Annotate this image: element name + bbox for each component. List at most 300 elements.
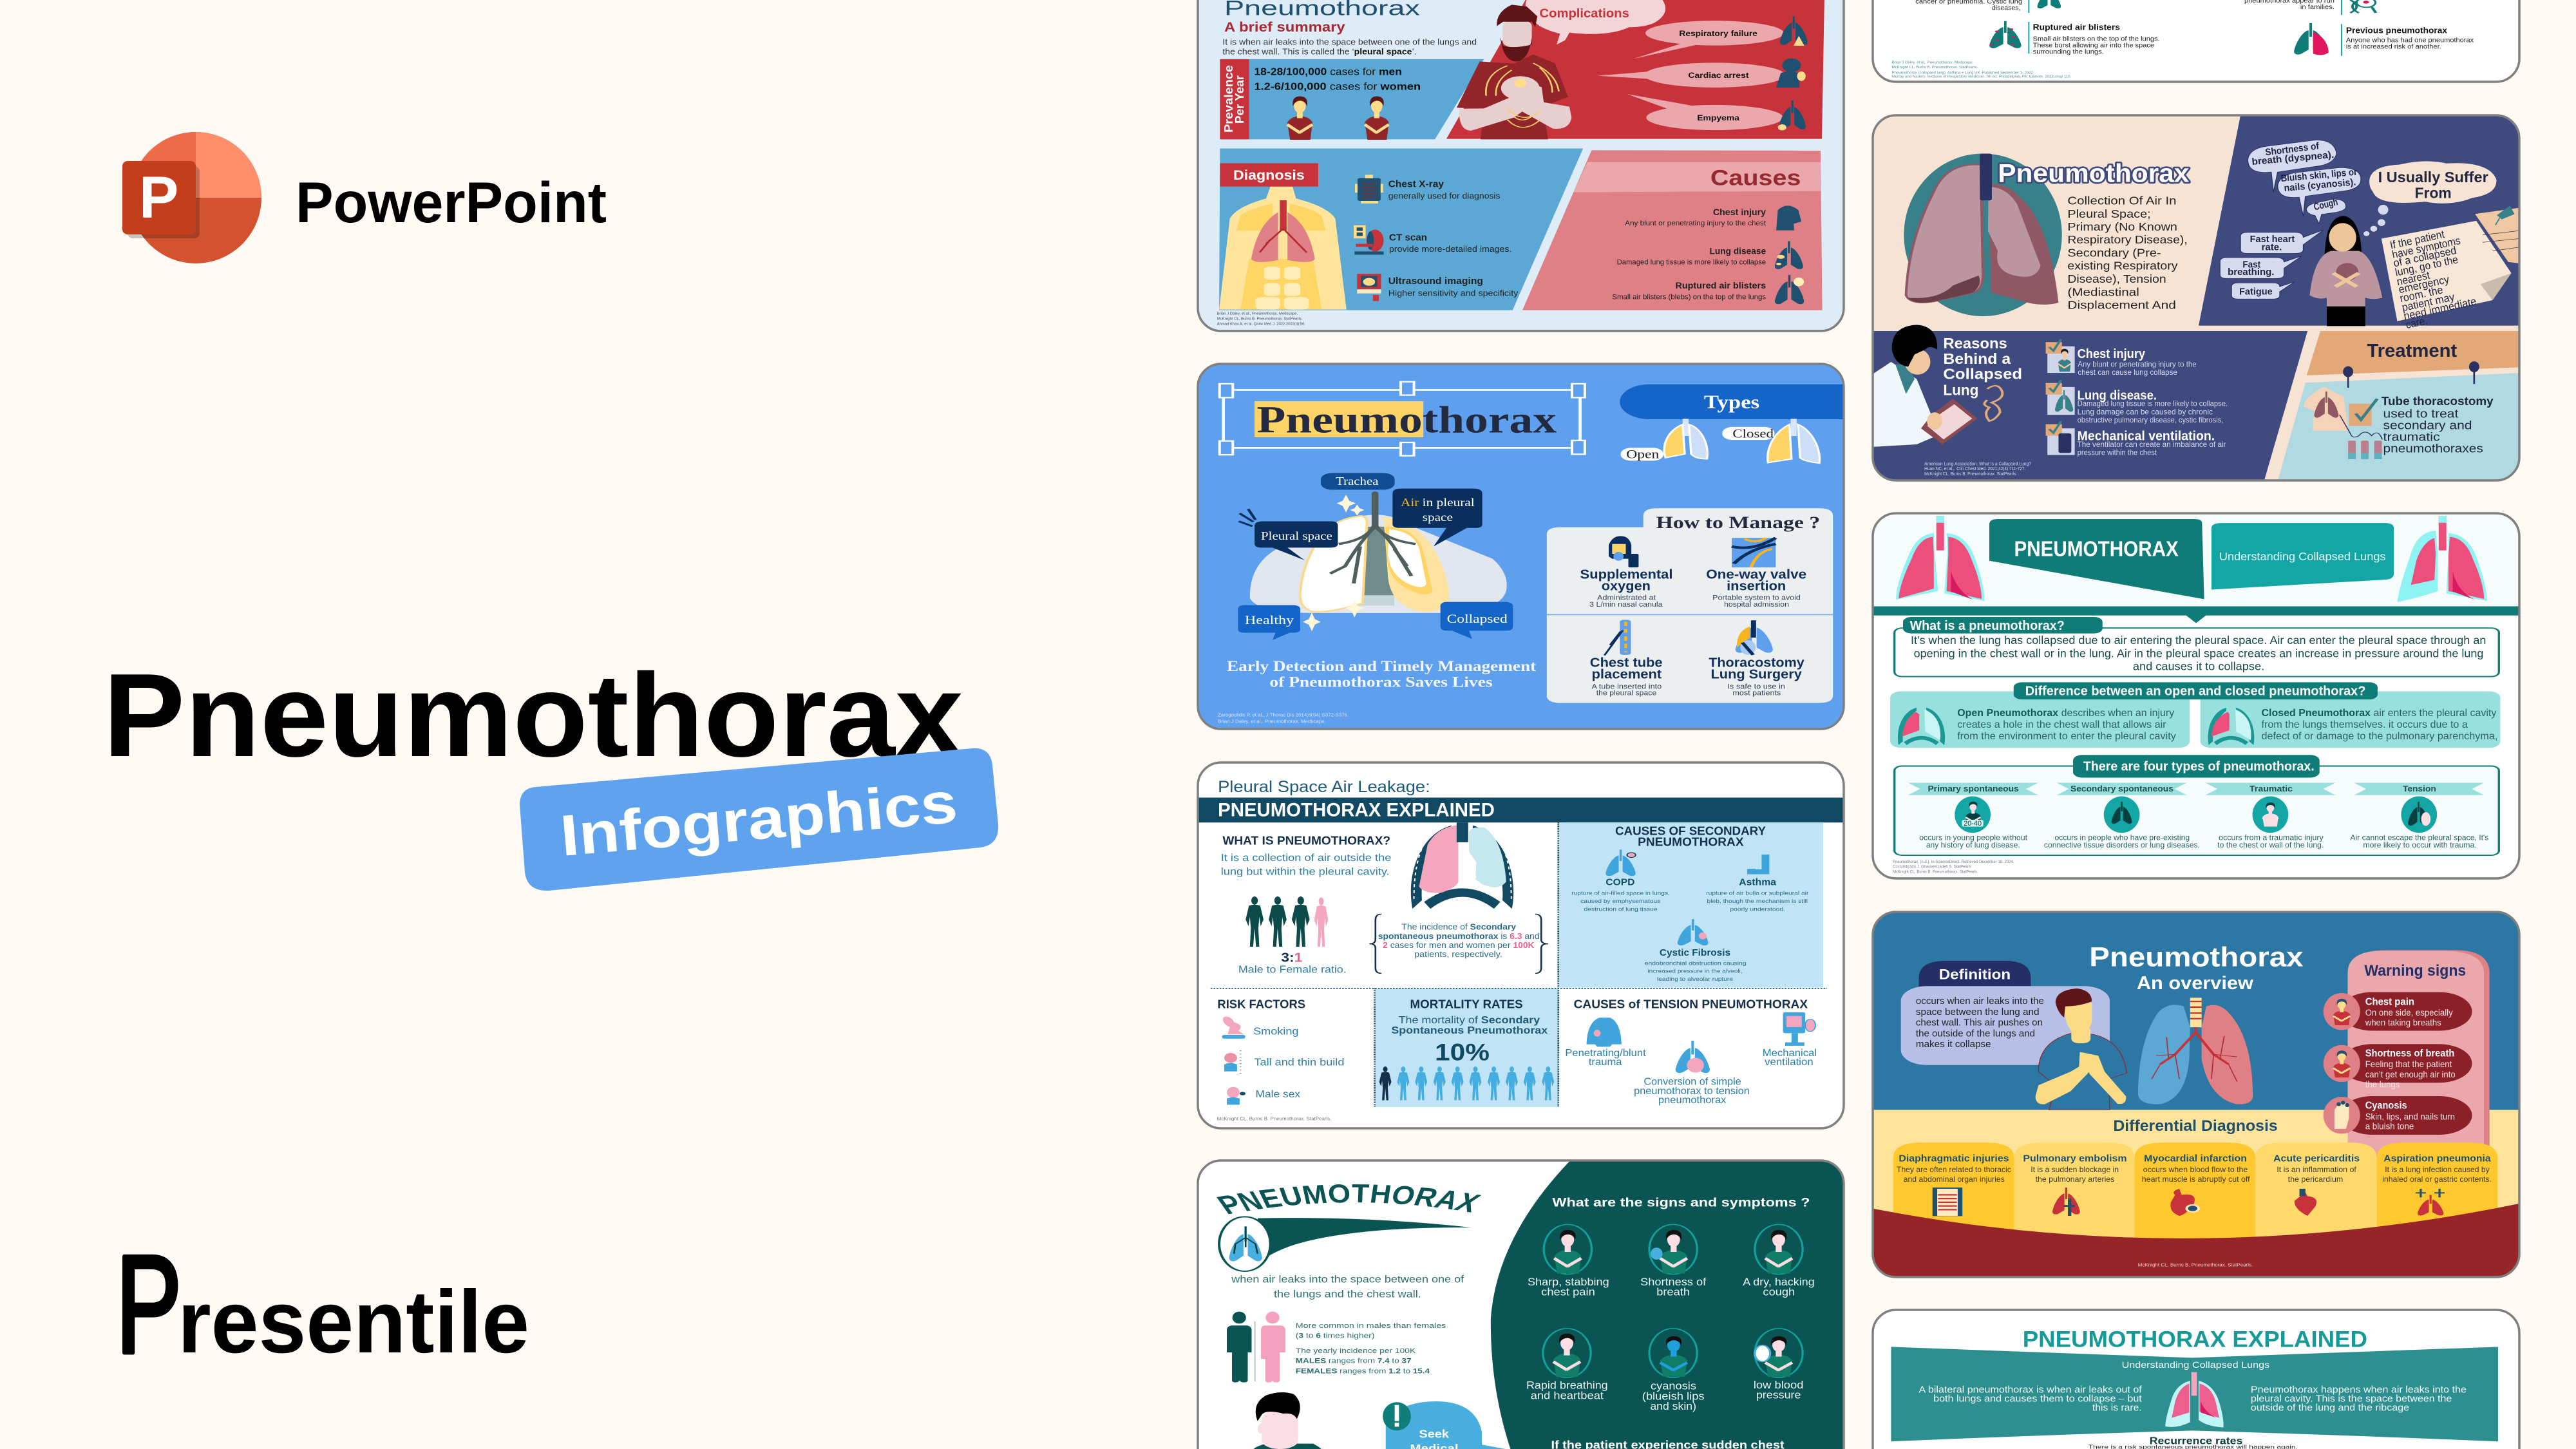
section: treatment: traumatic <box>2383 430 2440 444</box>
references: Pneumothorax (collapsed lung). Asthma + Lung UK. Published September 1, 2022. <box>1892 71 2034 75</box>
section: open vs closed: Open Pneumothorax describes when an injury <box>1957 706 2175 718</box>
definition card <box>1901 961 2110 1065</box>
section: causes of secondary: PNEUMOTHORAX <box>1638 835 1744 849</box>
item: Thoracostomy Lung Surgery: most patients <box>1732 689 1781 697</box>
callout: Collapsed <box>1441 602 1513 639</box>
section: causes of secondary: COPD <box>1605 877 1634 887</box>
section: what is a pneumothorax: What is a pneumothorax? <box>1910 618 2065 632</box>
label: Prevalence Per Year: Prevalence <box>1222 65 1235 133</box>
subtitle shape <box>2211 523 2394 589</box>
item: ruptured air blisters: surrounding the lungs. <box>2033 48 2104 55</box>
definition text: the lungs and the chest wall. <box>1274 1289 1421 1300</box>
statistics text: More common in males than females <box>1296 1321 1446 1330</box>
item: Thoracostomy Lung Surgery: Thoracostomy <box>1709 656 1804 670</box>
lungs illustration <box>2165 1372 2224 1428</box>
item: One-way valve insertion: Portable system to avoid <box>1712 594 1801 601</box>
references <box>1892 61 2071 79</box>
section: causes of tension: Mechanical <box>1763 1047 1817 1058</box>
section: causes of secondary: rupture of air-filled space in lungs, <box>1571 890 1670 896</box>
diagnosis items: provide more-detailed images. <box>1389 245 1511 254</box>
warning signs panel: Shortness of breath <box>2365 1047 2454 1059</box>
types: closed lung <box>1722 419 1820 463</box>
subheading: A brief summary: A brief summary <box>1224 19 1345 35</box>
section: four types: occurs in young people without <box>1919 833 2027 842</box>
reason rows: Mechanical ventilation. <box>2078 429 2215 443</box>
symptom labels: A dry, hacking <box>1743 1276 1815 1288</box>
teal band <box>1891 1347 2498 1441</box>
badge: Infographics: Infographics <box>558 771 960 869</box>
panel: Pneumothorax explained (epidemiology) <box>1198 762 1844 1128</box>
reason rows: Lung damage can be caused by chronic <box>2078 407 2213 416</box>
differential cards: It is an inflammation of <box>2277 1165 2356 1174</box>
section: four types: occurs from a traumatic injury <box>2219 833 2324 842</box>
callout: incidence braces: patients, respectively. <box>1414 949 1502 959</box>
lung diagram <box>1239 493 1507 631</box>
rotated bubble text: Bluish skin, lips or <box>2280 167 2358 184</box>
heading: signs and symptoms: What are the signs and symptoms ? <box>1552 1195 1810 1209</box>
types: closed lung: Closed <box>1732 426 1774 440</box>
callout: Healthy: Healthy <box>1245 613 1294 627</box>
diagnosis items: Higher sensitivity and specificity <box>1388 289 1518 298</box>
symptom labels: and skin) <box>1650 1400 1696 1412</box>
panel: risk factors (cropped top) <box>1873 0 2519 82</box>
references: McKnight CL, Burns B. Pneumothorax. StatPearls. <box>1217 317 1302 321</box>
section: four types: occurs in people who have pre-existing <box>2054 833 2190 842</box>
speech bubbles: complications list: Cardiac arrest <box>1688 71 1749 80</box>
figure: man holding chest <box>1457 5 1571 139</box>
section: causes of secondary <box>1571 824 1808 982</box>
panel: Pneumothorax explained (bottom, cropped) <box>1873 1310 2519 1449</box>
definition text <box>1231 1274 1464 1300</box>
warning signs panel: Cyanosis <box>2365 1099 2407 1111</box>
reference: McKnight CL, Burns B. Pneumothorax. StatPearls. <box>1217 1117 1332 1122</box>
symptom labels: and heartbeat <box>1531 1389 1604 1401</box>
description text: Primary (No Known <box>2067 220 2177 233</box>
differential icons <box>1933 1188 2445 1216</box>
complications red block <box>1446 0 1824 139</box>
section: four types: any history of lung disease. <box>1926 840 2020 849</box>
section: causes of secondary: endobronchial obstruction causing <box>1645 960 1747 966</box>
references: Brian J Daley, et al,. Pneumothorax. Medscape. <box>1892 61 1973 64</box>
note text: nearest <box>2396 269 2431 288</box>
causes block: Chest injury <box>1713 207 1766 217</box>
speech bubble labels: Fast heart <box>2250 234 2295 245</box>
note text: have symptoms <box>2391 234 2461 261</box>
note text: need immediate <box>2403 295 2477 323</box>
differential cards: Myocardial infarction <box>2144 1153 2247 1164</box>
section: mortality rates: Spontaneous Pneumothorax <box>1391 1024 1548 1036</box>
callout: Healthy <box>1238 605 1300 640</box>
causes block: Lung disease <box>1710 247 1766 256</box>
callout: incidence braces: 2 cases for men and women per 100K <box>1383 940 1535 950</box>
section: causes of secondary: increased pressure in the alveoli, <box>1647 968 1743 974</box>
heading: reasons behind a collapsed lung: Reasons <box>1943 335 2007 352</box>
references: American Lung Association. What Is a Collapsed Lung? <box>1924 462 2031 467</box>
section: what is a pneumothorax <box>1895 617 2499 677</box>
symptom labels: (blueish lips <box>1642 1390 1705 1402</box>
note text: of a collapsed <box>2392 244 2458 269</box>
thought cloud: Complications: Complications <box>1540 6 1629 21</box>
left and right descriptions: this is rare. <box>2092 1402 2142 1413</box>
section: mortality rates: 10% <box>1435 1039 1490 1066</box>
item: Supplemental oxygen <box>1580 536 1672 609</box>
causes block: Damaged lung tissue is more likely to collapse <box>1617 258 1766 266</box>
lungs right (collapsed) <box>2397 516 2487 602</box>
symptom labels: cyanosis <box>1651 1379 1696 1392</box>
label: Diagnosis <box>1220 164 1318 187</box>
tagline: of Pneumothorax Saves Lives <box>1269 674 1493 690</box>
speech bubble labels: Fast <box>2242 260 2260 270</box>
section: treatment <box>2278 331 2521 481</box>
section: risk factors <box>1217 997 1344 1104</box>
section: four types: connective tissue disorders or lung diseases. <box>2044 840 2200 849</box>
differential cards: Diaphragmatic injuries <box>1899 1153 2009 1164</box>
diagnosis items: Ultrasound imaging <box>1388 276 1483 286</box>
Presentile logo: P <box>116 1226 182 1382</box>
note text <box>2389 228 2477 331</box>
speech bubbles: complications list: Empyema <box>1697 114 1739 122</box>
prevalence block <box>1220 59 1484 140</box>
section: causes of tension: CAUSES of TENSION PNEUMOTHORAX <box>1574 997 1808 1011</box>
section: causes of secondary: leading to alveolar rupture <box>1657 976 1733 982</box>
summary text: It is when air leaks into the space between one of the lungs and <box>1222 37 1477 47</box>
warning signs panel: the lungs <box>2365 1080 2400 1090</box>
section: causes of tension: Conversion of simple <box>1643 1076 1741 1087</box>
rotated bubble text <box>2251 140 2358 213</box>
definition card: space between the lung and <box>1916 1007 2040 1018</box>
arched title <box>1217 1184 1481 1215</box>
prevalence block: 18-28/100,000 cases for men <box>1254 66 1402 77</box>
differential cards: Aspiration pneumonia <box>2383 1153 2491 1164</box>
subtitle: Understanding Collapsed Lungs <box>2122 1359 2269 1370</box>
warning signs panel: can’t get enough air into <box>2365 1070 2456 1079</box>
definition card: the outside of the lungs and <box>1916 1028 2035 1039</box>
item: previous pneumothorax: Previous pneumothorax <box>2346 26 2447 35</box>
section: four types: Secondary spontaneous <box>2070 784 2174 793</box>
references <box>1893 859 2014 874</box>
definition card: occurs when air leaks into the <box>1916 996 2044 1006</box>
speech bubbles: complications list: Respiratory failure <box>1679 29 1757 38</box>
differential cards: Pulmonary embolism <box>2023 1153 2127 1164</box>
differential cards: the pericardium <box>2288 1175 2343 1184</box>
causes block: Small air blisters (blebs) on the top of the lungs <box>1612 293 1766 301</box>
references <box>1217 312 1305 326</box>
callout: Air in pleural space <box>1392 489 1482 547</box>
section: what is a pneumothorax: and causes it to collapse. <box>2133 660 2264 673</box>
references: Ahmad Khan A, et al. Qatar Med J. 2022;2022(4):56. <box>1217 322 1305 326</box>
section: what is pneumothorax: It is a collection of air outside the <box>1221 852 1391 863</box>
prevalence block: 1.2-6/100,000 cases for women <box>1254 81 1421 92</box>
symptom labels: breath <box>1656 1285 1690 1298</box>
section: causes of secondary: rupture of air bulla or subpleural air <box>1706 890 1808 896</box>
note text: lung, go to the <box>2394 253 2459 279</box>
panel: symptoms, reasons and treatment <box>1870 115 2521 481</box>
thought cloud: I Usually Suffer <box>2378 169 2488 185</box>
section: causes of secondary: destruction of lung tissue <box>1584 906 1658 913</box>
symptom labels: cough <box>1763 1285 1795 1298</box>
section: causes of tension: pneumothorax to tension <box>1634 1085 1750 1096</box>
reason rows: Lung disease. <box>2078 388 2157 402</box>
warning signs panel: when taking breaths <box>2365 1018 2441 1028</box>
figure: woman <box>2309 216 2382 326</box>
differential cards: It is a sudden blockage in <box>2031 1165 2119 1174</box>
reason rows: The ventilator can create an imbalance of air <box>2078 440 2226 449</box>
section: risk factors: Male sex <box>1255 1088 1301 1100</box>
item: One-way valve insertion: insertion <box>1727 579 1786 593</box>
differential cards: It is a lung infection caused by <box>2385 1165 2490 1174</box>
title: Pneumothorax <box>1998 158 2189 187</box>
cropped item: cystic lung diseases <box>1915 0 2061 13</box>
statistics text: MALES ranges from 7.4 to 37 <box>1296 1356 1412 1365</box>
label: Diagnosis: Diagnosis <box>1233 168 1305 183</box>
speech bubble labels: Fatigue <box>2239 287 2273 297</box>
section: causes of tension: Penetrating/blunt <box>1565 1047 1646 1058</box>
icon: PowerPoint <box>122 132 261 263</box>
title <box>2089 941 2304 993</box>
heading: reasons behind a collapsed lung: Collapsed <box>1943 366 2022 383</box>
band with pointer <box>1873 606 2520 623</box>
section: open vs closed: creates a hole in the chest wall that allows air <box>1957 718 2166 730</box>
thought cloud: Complications <box>1526 0 1665 44</box>
description text: Pleural Space; <box>2067 207 2151 220</box>
label: Prevalence Per Year <box>1224 66 1244 132</box>
reason rows: obstructive pulmonary disease, cystic fibrosis, <box>2078 415 2223 424</box>
item: Supplemental oxygen: Supplemental <box>1580 567 1672 581</box>
warning signs panel: On one side, especially <box>2365 1008 2453 1018</box>
item: previous pneumothorax <box>2294 23 2474 56</box>
title bar <box>1198 798 1842 822</box>
section: risk factors: Tall and thin build <box>1254 1056 1344 1068</box>
statistics text: (3 to 6 times higher) <box>1296 1331 1375 1340</box>
heading: Differential Diagnosis: Differential Diagnosis <box>2113 1117 2278 1135</box>
gender figures <box>1227 1312 1285 1383</box>
section: four types <box>1895 755 2499 855</box>
speech bubbles: symptoms <box>2220 140 2361 299</box>
reason rows: Any blunt or penetrating injury to the <box>2078 359 2197 368</box>
note paper <box>2382 207 2519 321</box>
warning signs panel <box>2324 950 2490 1175</box>
callout: Trachea <box>1321 473 1395 489</box>
panel: brief summary, complications, diagnosis, causes <box>1198 0 1844 331</box>
heading: Pleural Space Air Leakage: Pleural Space Air Leakage: <box>1218 777 1430 796</box>
figure: patient <box>1253 1392 1321 1449</box>
speech bubble labels: breathing. <box>2228 267 2274 278</box>
item: ruptured air blisters <box>1989 21 2160 55</box>
item: Thoracostomy Lung Surgery: Is safe to use in <box>1727 682 1785 690</box>
causes block <box>1522 150 1823 310</box>
item: previous pneumothorax: is at increased risk of another. <box>2346 43 2441 50</box>
figure: 3 to 1 ratio: 3:1 <box>1281 951 1302 965</box>
badge: Infographics <box>520 748 998 891</box>
item: Supplemental oxygen: 3 L/min nasal canula <box>1589 600 1663 609</box>
description text: Secondary (Pre- <box>2067 247 2161 260</box>
item: Supplemental oxygen: Administrated at <box>1597 594 1656 601</box>
label: Prevalence Per Year: Per Year <box>1233 75 1246 124</box>
PowerPoint logo lockup <box>122 132 607 263</box>
callout: seek medical: Seek <box>1419 1428 1449 1441</box>
item: Supplemental oxygen: oxygen <box>1602 579 1651 593</box>
symptom labels: Shortness of <box>1640 1276 1707 1288</box>
types header <box>1620 384 1843 419</box>
callout: Collapsed: Collapsed <box>1447 612 1508 625</box>
symptom labels: Sharp, stabbing <box>1528 1276 1609 1288</box>
warning signs panel: Warning signs <box>2364 962 2466 979</box>
section: causes of tension: ventilation <box>1765 1056 1814 1068</box>
item: ruptured air blisters: Ruptured air blisters <box>2033 23 2120 32</box>
speech bubbles: complications list <box>1597 16 1808 130</box>
panel: Pneumothorax types and management <box>1198 364 1876 729</box>
symptom labels: chest pain <box>1541 1285 1595 1298</box>
section: treatment: pneumothoraxes <box>2383 442 2483 455</box>
note text: room. the <box>2399 283 2444 305</box>
description text: Disease), Tension <box>2067 272 2166 285</box>
swoosh with lung badge <box>1219 1217 1471 1271</box>
rotated bubble text: nails (cyanosis). <box>2284 176 2356 194</box>
section: open vs closed: from the environment to enter the pleural cavity <box>1957 730 2176 741</box>
bottom red wave <box>1870 1203 2523 1282</box>
types header: Types <box>1704 392 1759 413</box>
callout: Trachea: Trachea <box>1336 475 1378 488</box>
callout: Pleural space: Pleural space <box>1261 530 1332 542</box>
definition card: makes it collapse <box>1916 1039 1991 1050</box>
symptom labels: low blood <box>1754 1379 1803 1391</box>
references <box>1924 462 2031 477</box>
left and right descriptions: both lungs and causes them to collapse – but <box>1933 1393 2142 1404</box>
symptom labels <box>1526 1276 1815 1412</box>
causes block: Causes <box>1710 166 1801 190</box>
callout: incidence braces: The incidence of Secondary <box>1401 922 1517 931</box>
symptom labels: pressure <box>1756 1388 1801 1401</box>
section: risk factors: RISK FACTORS <box>1217 997 1305 1011</box>
section: causes of tension: trauma <box>1589 1056 1622 1068</box>
types: open lung <box>1621 419 1707 461</box>
definition card: chest wall. This air pushes on <box>1916 1018 2043 1028</box>
cropped item: cystic lung diseases: diseases, <box>1992 5 2020 12</box>
section: four types: to the chest or wall of the lung. <box>2217 840 2324 849</box>
description text <box>2067 194 2188 312</box>
section: four types: more likely to occur with trauma. <box>2363 840 2477 849</box>
section: treatment: secondary and <box>2383 418 2472 432</box>
rotated bubble text: Cough <box>2313 196 2339 213</box>
diagnosis items: Chest X-ray <box>1388 178 1444 189</box>
note text: If the patient <box>2389 228 2446 252</box>
section: what is pneumothorax: WHAT IS PNEUMOTHORAX? <box>1222 834 1390 848</box>
differential cards: and abdominal organ injuries <box>1904 1175 2005 1184</box>
recurrence rates: Recurrence rates <box>2150 1435 2242 1446</box>
PowerPoint wordmark: PowerPoint <box>296 170 607 234</box>
section: four types: Traumatic <box>2249 784 2293 793</box>
arched title: PNEUMOTHORAX <box>1217 1184 1481 1215</box>
section: four types: There are four types of pneumothorax. <box>2083 759 2315 773</box>
section: four types: Tension <box>2403 784 2436 793</box>
description text: Collection Of Air In <box>2067 194 2177 207</box>
figure: 3 to 1 ratio <box>1238 896 1347 975</box>
section: mortality rates: MORTALITY RATES <box>1410 997 1523 1011</box>
callout: Air in pleural space: space <box>1423 511 1453 524</box>
section: treatment: used to treat <box>2383 406 2459 421</box>
differential cards: inhaled oral or gastric contents. <box>2382 1175 2492 1184</box>
lungs illustration <box>2138 998 2253 1104</box>
Presentile logo: resentile <box>178 1273 529 1372</box>
title shape <box>1989 519 2204 599</box>
how to manage card <box>1547 508 1833 703</box>
recurrence rates <box>2088 1435 2298 1449</box>
causes block: Any blunt or penetrating injury to the chest <box>1625 219 1766 227</box>
thought cloud <box>2363 161 2496 236</box>
description text: Respiratory Disease), <box>2067 234 2188 246</box>
figure: person <box>2036 989 2127 1110</box>
title: An overview <box>2137 972 2254 993</box>
callout: incidence braces <box>1370 914 1548 973</box>
section: mortality rates: The mortality of Secondary <box>1399 1014 1540 1026</box>
item: previous pneumothorax: Anyone who has had one pneumothorax <box>2346 37 2474 44</box>
section: what is pneumothorax: lung but within the pleural cavity. <box>1221 866 1390 877</box>
heading: reasons behind a collapsed lung <box>1943 335 2022 421</box>
Presentile logo <box>116 1226 529 1382</box>
item: Thoracostomy Lung Surgery: Lung Surgery <box>1711 667 1802 681</box>
main title: Pneumothorax <box>103 649 963 781</box>
dark teal background shape <box>1491 1159 1852 1449</box>
references: Murray and Nadel's Textbook of Respiratory Medicine. 7th ed. Philadelphia, PA: Elsevier. 2022:chap 110. <box>1892 75 2071 79</box>
note text: care. <box>2405 314 2429 331</box>
references: Brian J Daley, et al., Pneumothorax. Medscape. <box>1217 312 1298 316</box>
note text: patient may <box>2401 290 2456 314</box>
diagnosis blue block <box>1219 149 1583 310</box>
references: McKnight CL, Burns B. Pneumothorax. StatPearls. <box>1893 869 1978 874</box>
icon: PowerPoint: P <box>139 165 178 231</box>
diagnosis items: generally used for diagnosis <box>1388 191 1501 200</box>
section: causes of secondary: poorly understood. <box>1730 906 1785 913</box>
heading: reasons behind a collapsed lung: Lung <box>1943 382 1978 398</box>
thought cloud: From <box>2415 185 2452 201</box>
item: One-way valve insertion: hospital admission <box>1724 600 1789 609</box>
tagline: Early Detection and Timely Management <box>1227 658 1536 674</box>
heading: reasons behind a collapsed lung: Behind a <box>1943 350 2011 367</box>
reference: McKnight CL, Burns B. Pneumothorax. StatPearls. <box>2138 1263 2253 1268</box>
figure: doctor <box>1873 325 1977 447</box>
references: Pneumothorax. (n.d.). In ScienceDirect. Retrieved December 18, 2024. <box>1893 859 2014 864</box>
title with selection frame: Pneumothorax <box>1256 399 1557 441</box>
title with selection frame <box>1220 382 1585 456</box>
lungs illustration <box>1904 153 2062 316</box>
section: causes of tension: pneumothorax <box>1658 1094 1727 1106</box>
diagnosis items: CT scan <box>1389 232 1427 243</box>
warning signs panel: Feeling that the patient <box>2365 1059 2452 1070</box>
references: McKnight CL, Burns B. Pneumothorax. StatPearls. <box>1892 66 1978 69</box>
description text: Displacement And <box>2067 299 2176 312</box>
summary text <box>1222 37 1477 57</box>
differential cards: They are often related to thoracic <box>1897 1165 2011 1174</box>
warning signs panel: Chest pain <box>2365 996 2414 1007</box>
differential cards: heart muscle is abruptly cut off <box>2142 1175 2250 1184</box>
description text: (Mediastinal <box>2067 286 2139 299</box>
callout: Pleural space <box>1255 521 1338 560</box>
panel: Pneumothorax signs and symptoms <box>1197 1159 1845 1449</box>
item: Chest tube placement <box>1590 620 1663 697</box>
symptom icons <box>1543 1224 1803 1378</box>
references: McKnight CL, Burns B. Pneumothorax. StatPearls. <box>1924 471 2017 477</box>
item: Chest tube placement: Chest tube <box>1590 656 1663 670</box>
warning signs panel: Skin, lips, and nails turn <box>2365 1112 2455 1122</box>
section: what is pneumothorax <box>1221 834 1391 877</box>
lungs left <box>1896 516 1984 601</box>
title: Pneumothorax <box>2089 941 2304 972</box>
symptom labels: Rapid breathing <box>1526 1379 1608 1391</box>
title shape: PNEUMOTHORAX <box>2014 537 2179 561</box>
references <box>1218 713 1349 724</box>
definition text: when air leaks into the space between one of <box>1231 1274 1464 1285</box>
item: Thoracostomy Lung Surgery <box>1709 620 1804 697</box>
